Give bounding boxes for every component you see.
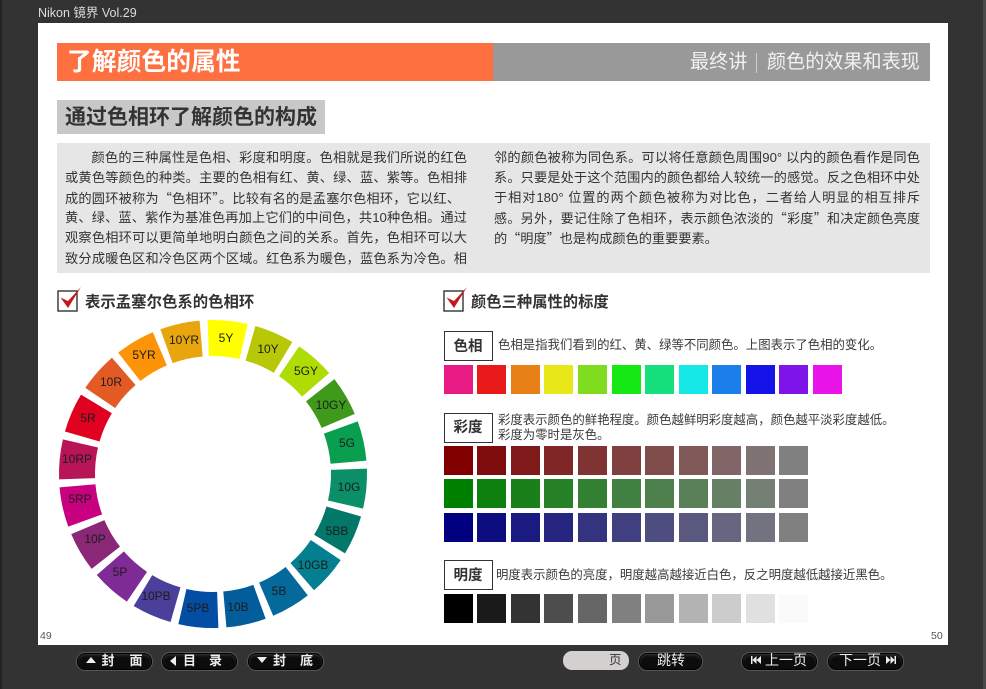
button: next page bbox=[827, 652, 904, 670]
header label: Nikon 镜界 Vol.29 bbox=[38, 6, 137, 20]
heading: munsell wheel: 表示孟塞尔色系的色相环 bbox=[85, 294, 254, 311]
hue swatches bbox=[444, 365, 842, 394]
page input bbox=[563, 651, 629, 670]
button: cover: 面 bbox=[130, 652, 143, 668]
value label: 明度 bbox=[454, 568, 482, 584]
intro text panel bbox=[57, 143, 930, 273]
section heading bbox=[57, 100, 324, 134]
left text column: 致分成暖色区和冷色区两个区域。红色系为暖色，蓝色系为冷色。相 bbox=[65, 250, 467, 266]
chroma description: 彩度为零时是灰色。 bbox=[498, 428, 610, 442]
button: cover: 封 bbox=[102, 652, 115, 668]
right text column: 感。另外，要记住除了色相环，表示颜色浓淡的“彩度”和决定颜色亮度 bbox=[494, 208, 920, 227]
chroma swatches bbox=[444, 446, 808, 542]
page number left: 49 bbox=[40, 630, 52, 642]
button: cover bbox=[76, 652, 152, 670]
munsell hue wheel: 5BB bbox=[326, 524, 348, 538]
munsell hue wheel: 5Y bbox=[219, 331, 233, 345]
munsell hue wheel: 10Y bbox=[257, 342, 279, 356]
button: previous page: 上一页 bbox=[765, 652, 807, 668]
button: back cover bbox=[247, 652, 324, 670]
hue label bbox=[444, 330, 492, 360]
series number subtitle: 最终讲 bbox=[690, 52, 747, 72]
munsell hue wheel: 10PB bbox=[141, 589, 171, 603]
left text column bbox=[65, 150, 467, 266]
button: next page: 下一页 bbox=[839, 652, 881, 668]
munsell hue wheel: 10GY bbox=[316, 398, 346, 412]
button: previous page bbox=[741, 652, 818, 670]
button: contents: 录 bbox=[209, 652, 222, 668]
subtitle separator bbox=[756, 52, 757, 72]
hue label: 色相 bbox=[454, 338, 482, 354]
left edge strip bbox=[0, 0, 2, 689]
button: contents: 目 bbox=[183, 652, 196, 668]
munsell hue wheel: 10B bbox=[227, 600, 249, 614]
munsell hue wheel: 5YR bbox=[132, 348, 156, 362]
chroma label bbox=[444, 413, 492, 443]
munsell hue wheel: 10R bbox=[100, 375, 122, 389]
left text column: 观察色相环可以更简单地明白颜色之间的关系。首先，色相环可以大 bbox=[65, 230, 467, 245]
icon: checkbox left bbox=[57, 287, 81, 312]
munsell hue wheel: 10P bbox=[84, 532, 106, 546]
munsell hue wheel: 10G bbox=[338, 480, 360, 494]
value swatches bbox=[444, 594, 775, 623]
icon: checkbox right bbox=[443, 287, 467, 312]
green row bbox=[444, 479, 808, 508]
orange title bar: 了解颜色的属性 bbox=[67, 48, 241, 76]
right text column: 的“明度”也是构成颜色的重要要素。 bbox=[494, 228, 718, 247]
hue description: 色相是指我们看到的红、黄、绿等不同颜色。上图表示了色相的变化。 bbox=[498, 338, 882, 352]
left text column: 成的圆环被称为“色相环”。比较有名的是孟塞尔色相环，它以红、 bbox=[65, 188, 460, 207]
right text column: 邻的颜色被称为同色系。可以将任意颜色周围90° 以内的颜色看作是同色 bbox=[494, 150, 920, 164]
munsell hue wheel: 5RP bbox=[68, 492, 92, 506]
munsell hue wheel: 5PB bbox=[187, 601, 209, 615]
page input: 页 bbox=[609, 653, 622, 667]
button: back cover: 封 bbox=[273, 652, 286, 668]
subtitle topic: 颜色的效果和表现 bbox=[767, 52, 920, 72]
munsell hue wheel: 5P bbox=[113, 565, 127, 579]
left text column: 黄、绿、蓝、紫作为基准色再加上它们的中间色，共10种色相。通过 bbox=[65, 210, 467, 225]
page number right: 50 bbox=[931, 630, 943, 642]
value description: 明度表示颜色的亮度，明度越高越接近白色，反之明度越低越接近黑色。 bbox=[496, 568, 892, 582]
munsell hue wheel: 5B bbox=[272, 584, 286, 598]
munsell hue wheel bbox=[59, 320, 367, 628]
munsell hue wheel: 5R bbox=[80, 411, 96, 425]
chroma label: 彩度 bbox=[454, 420, 482, 436]
button: jump bbox=[638, 652, 702, 670]
orange title bar bbox=[57, 42, 493, 81]
heading: attributes: 颜色三种属性的标度 bbox=[471, 294, 609, 311]
left text column: 或黄色等颜色的种类。主要的色相有红、黄、绿、蓝、紫等。色相排 bbox=[65, 170, 467, 185]
munsell hue wheel: 5G bbox=[339, 436, 355, 450]
munsell hue wheel: 10YR bbox=[169, 333, 199, 347]
button: contents bbox=[161, 652, 238, 670]
right text column bbox=[494, 150, 920, 247]
left text column: 颜色的三种属性是色相、彩度和明度。色相就是我们所说的红色 bbox=[92, 150, 467, 164]
munsell hue wheel: 5GY bbox=[294, 364, 318, 378]
button: back cover: 底 bbox=[300, 652, 313, 668]
chroma description bbox=[498, 413, 894, 442]
section heading: 通过色相环了解颜色的构成 bbox=[65, 106, 317, 129]
value label bbox=[444, 560, 492, 590]
blue row bbox=[444, 513, 808, 542]
right text column: 于相对180° 位置的两个颜色被称为对比色，二者给人明显的相互排斥 bbox=[494, 190, 920, 205]
chroma description: 彩度表示颜色的鲜艳程度。颜色越鲜明彩度越高，颜色越平淡彩度越低。 bbox=[498, 413, 894, 427]
munsell hue wheel: 10RP bbox=[62, 452, 92, 466]
button: jump: 跳转 bbox=[657, 652, 685, 668]
title banner bbox=[57, 42, 930, 81]
munsell hue wheel: 10GB bbox=[298, 558, 328, 572]
right text column: 系。只要是处于这个范围内的颜色都给人较统一的感觉。反之色相环中处 bbox=[494, 170, 920, 185]
red row bbox=[444, 446, 808, 475]
right edge strip bbox=[983, 0, 986, 689]
